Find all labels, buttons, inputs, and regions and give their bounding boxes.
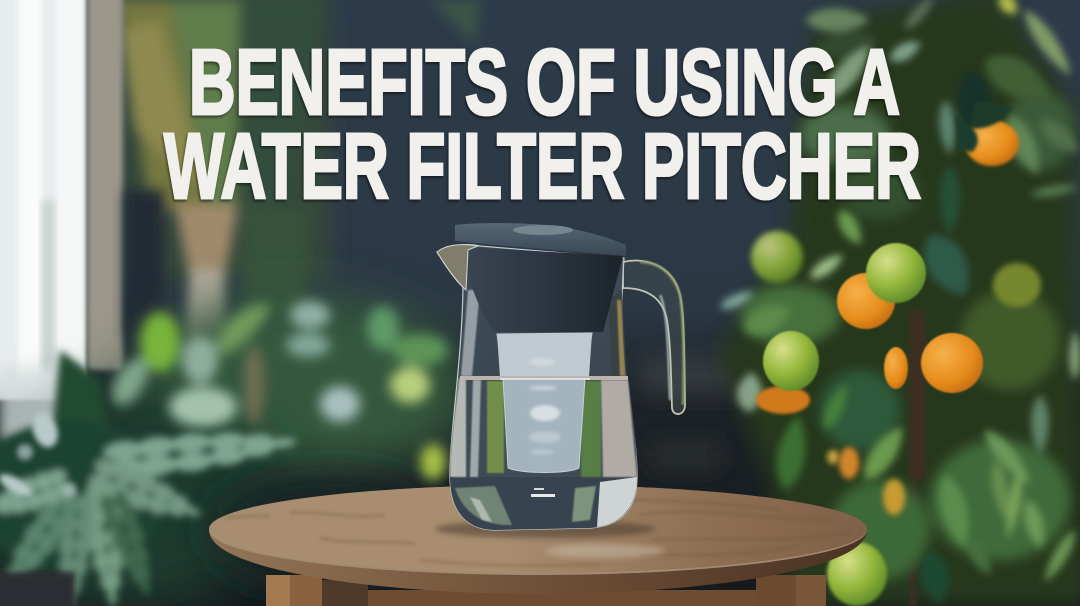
citrus tree, right <box>718 0 1080 606</box>
table legs <box>266 575 826 606</box>
water line <box>460 376 628 380</box>
title <box>164 30 921 218</box>
spout rim <box>437 245 478 290</box>
measurement marks <box>531 488 555 497</box>
glass body <box>437 245 637 530</box>
upper glass reflections <box>461 290 480 376</box>
oranges and limes <box>751 100 1041 606</box>
background palm and trunk <box>118 0 480 340</box>
soft mid-ground leaves <box>740 90 1075 580</box>
window and column <box>0 0 164 400</box>
filter cartridge <box>497 333 592 472</box>
round wooden table <box>209 485 867 606</box>
fern fronds <box>0 350 298 606</box>
water filter pitcher <box>437 223 685 530</box>
handle <box>623 261 685 414</box>
foliage, left <box>0 295 470 606</box>
water <box>450 378 637 477</box>
water base <box>450 477 637 530</box>
lid <box>455 223 626 256</box>
filter reservoir <box>463 247 623 332</box>
dark furniture behind <box>640 355 740 470</box>
